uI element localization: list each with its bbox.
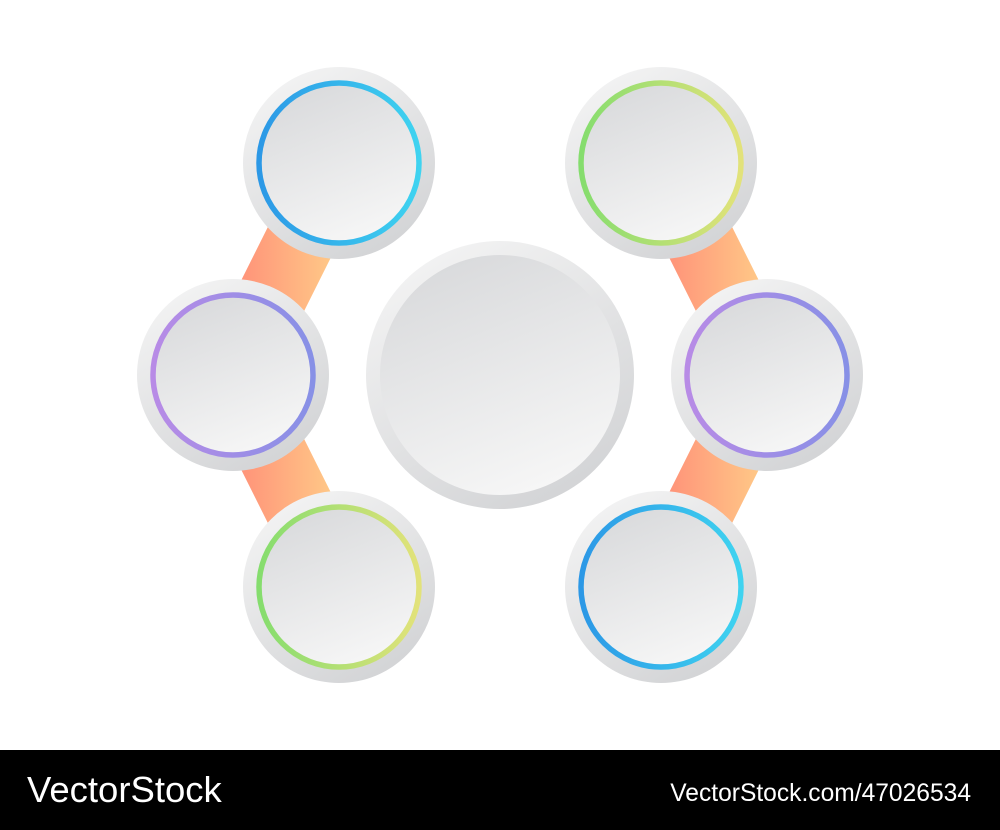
footer id text: VectorStock.com/47026534 <box>670 780 971 807</box>
circle: bottom right blue <box>565 491 757 683</box>
circle: top left blue <box>243 67 435 259</box>
connector: right top <box>661 163 767 375</box>
circle: top right green <box>565 67 757 259</box>
footer logo text: VectorStock <box>27 769 223 810</box>
connector: right bottom <box>661 375 767 587</box>
center circle <box>366 241 634 509</box>
circle: middle right purple <box>671 279 863 471</box>
circle: middle left purple <box>137 279 329 471</box>
footer bar <box>0 750 1000 830</box>
connector: left top <box>233 163 339 375</box>
connector: left bottom <box>233 375 339 587</box>
circle: bottom left green <box>243 491 435 683</box>
